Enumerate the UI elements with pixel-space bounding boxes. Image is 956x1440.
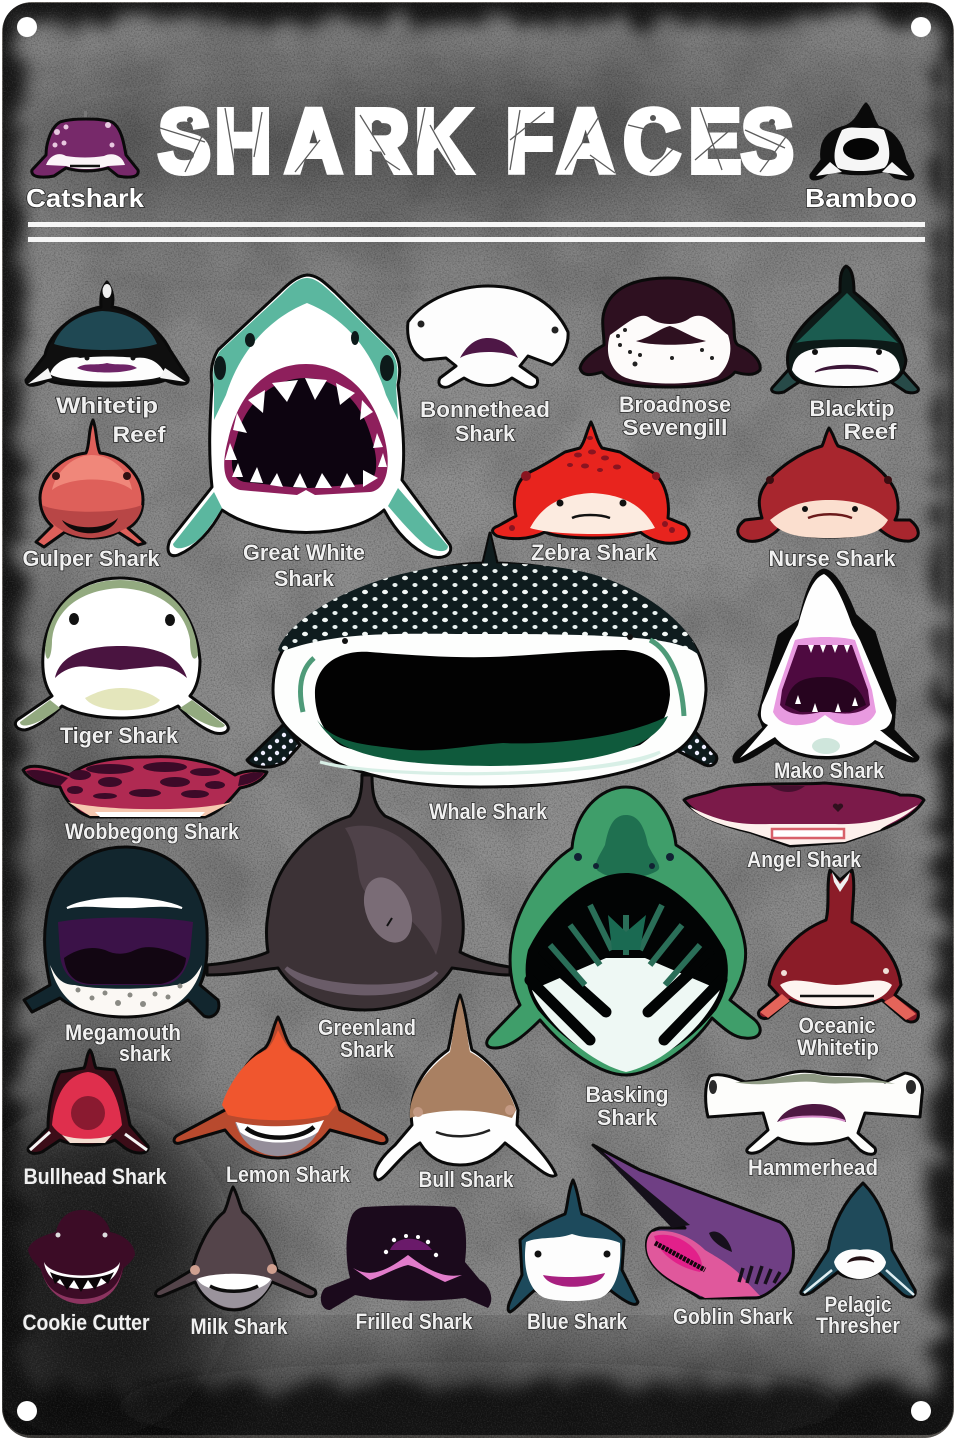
shark: whale <box>247 533 717 787</box>
shark: gulper <box>36 420 145 547</box>
label: nurse: Nurse Shark <box>768 546 896 571</box>
mouth <box>224 364 388 495</box>
label: greenland: Greenland <box>318 1015 416 1040</box>
shark: broadnose sevengill <box>580 278 760 387</box>
label: mako: Mako Shark <box>774 758 885 783</box>
label: angel: Angel Shark <box>747 847 862 872</box>
shark: blacktip reef <box>772 266 918 393</box>
label: oceanic whitetip <box>797 1013 879 1060</box>
shark: hammerhead <box>706 1071 922 1154</box>
label: whitetip reef <box>56 393 166 447</box>
title: SHARK FACES <box>158 90 794 191</box>
label: megamouth <box>65 1020 181 1066</box>
label: hammerhead: Hammerhead <box>748 1155 878 1180</box>
shark: lemon <box>174 1017 387 1158</box>
shark: zebra <box>493 422 689 543</box>
label: zebra: Zebra Shark <box>531 540 658 565</box>
shark: nurse <box>738 428 918 541</box>
label: whitetip reef: Reef <box>112 422 166 447</box>
shark: bamboo <box>811 104 913 179</box>
label: catshark: Catshark <box>26 183 145 213</box>
shark: wobbegong <box>23 757 267 817</box>
label: pelagic thresher: Pelagic <box>824 1292 892 1317</box>
shark: goblin <box>593 1145 793 1298</box>
label: bonnethead: Bonnethead <box>420 397 550 422</box>
label: blacktip reef: Blacktip <box>810 396 894 421</box>
shark: tiger <box>15 578 228 733</box>
label: oceanic whitetip: Whitetip <box>797 1035 879 1060</box>
label: bonnethead <box>420 397 550 446</box>
shark: catshark <box>32 111 138 177</box>
label: greenland: Shark <box>340 1037 395 1062</box>
shark: mako <box>734 570 918 762</box>
label: frilled: Frilled Shark <box>356 1309 473 1334</box>
label: basking <box>586 1082 668 1130</box>
label: great white: Great White <box>243 540 365 565</box>
shark: frilled <box>321 1206 491 1310</box>
label: broadnose sevengill: Broadnose <box>619 392 731 417</box>
shark: bull <box>375 995 556 1180</box>
label: gulper: Gulper Shark <box>22 546 160 571</box>
label: bull: Bull Shark <box>418 1167 514 1192</box>
label: broadnose sevengill: Sevengill <box>622 415 728 440</box>
shark: bullhead <box>28 1050 148 1153</box>
label: oceanic whitetip: Oceanic <box>798 1013 876 1038</box>
label: basking: Shark <box>597 1105 658 1130</box>
label: bonnethead: Shark <box>455 421 516 446</box>
shark: cookie cutter <box>28 1210 135 1304</box>
label: goblin: Goblin Shark <box>673 1304 794 1329</box>
shark: greenland <box>207 775 510 1010</box>
label: pelagic thresher: Thresher <box>816 1313 900 1338</box>
shark: blue <box>508 1180 638 1312</box>
label: tiger: Tiger Shark <box>60 723 179 748</box>
label: cookie cutter: Cookie Cutter <box>22 1310 150 1335</box>
label: blue: Blue Shark <box>527 1309 628 1334</box>
label: great white: Shark <box>274 566 335 591</box>
label: megamouth: shark <box>119 1041 172 1066</box>
label: bamboo: Bamboo <box>805 183 917 213</box>
shark: great white <box>168 275 451 558</box>
shark: bonnethead <box>408 286 568 387</box>
shark: milk <box>155 1187 316 1310</box>
label: wobbegong: Wobbegong Shark <box>65 819 240 844</box>
label: great white <box>243 540 365 591</box>
label: broadnose sevengill <box>619 392 731 440</box>
label: pelagic thresher <box>816 1292 900 1338</box>
shark: basking <box>487 787 760 1075</box>
label: bullhead: Bullhead Shark <box>24 1164 167 1189</box>
shark: oceanic whitetip <box>758 870 918 1022</box>
label: whale: Whale Shark <box>429 799 548 824</box>
shark: angel <box>684 783 924 846</box>
label: greenland <box>318 1015 416 1062</box>
label: blacktip reef: Reef <box>844 419 897 444</box>
header rules <box>28 222 925 242</box>
label: whitetip reef: Whitetip <box>56 393 158 418</box>
label: blacktip reef <box>810 396 897 444</box>
shark: whitetip reef <box>26 282 188 386</box>
label: megamouth: Megamouth <box>65 1020 181 1045</box>
label: lemon: Lemon Shark <box>226 1162 351 1187</box>
label: milk: Milk Shark <box>190 1314 288 1339</box>
shark: pelagic thresher <box>801 1183 915 1297</box>
label: basking: Basking <box>586 1082 668 1107</box>
shark: megamouth <box>24 847 219 1017</box>
